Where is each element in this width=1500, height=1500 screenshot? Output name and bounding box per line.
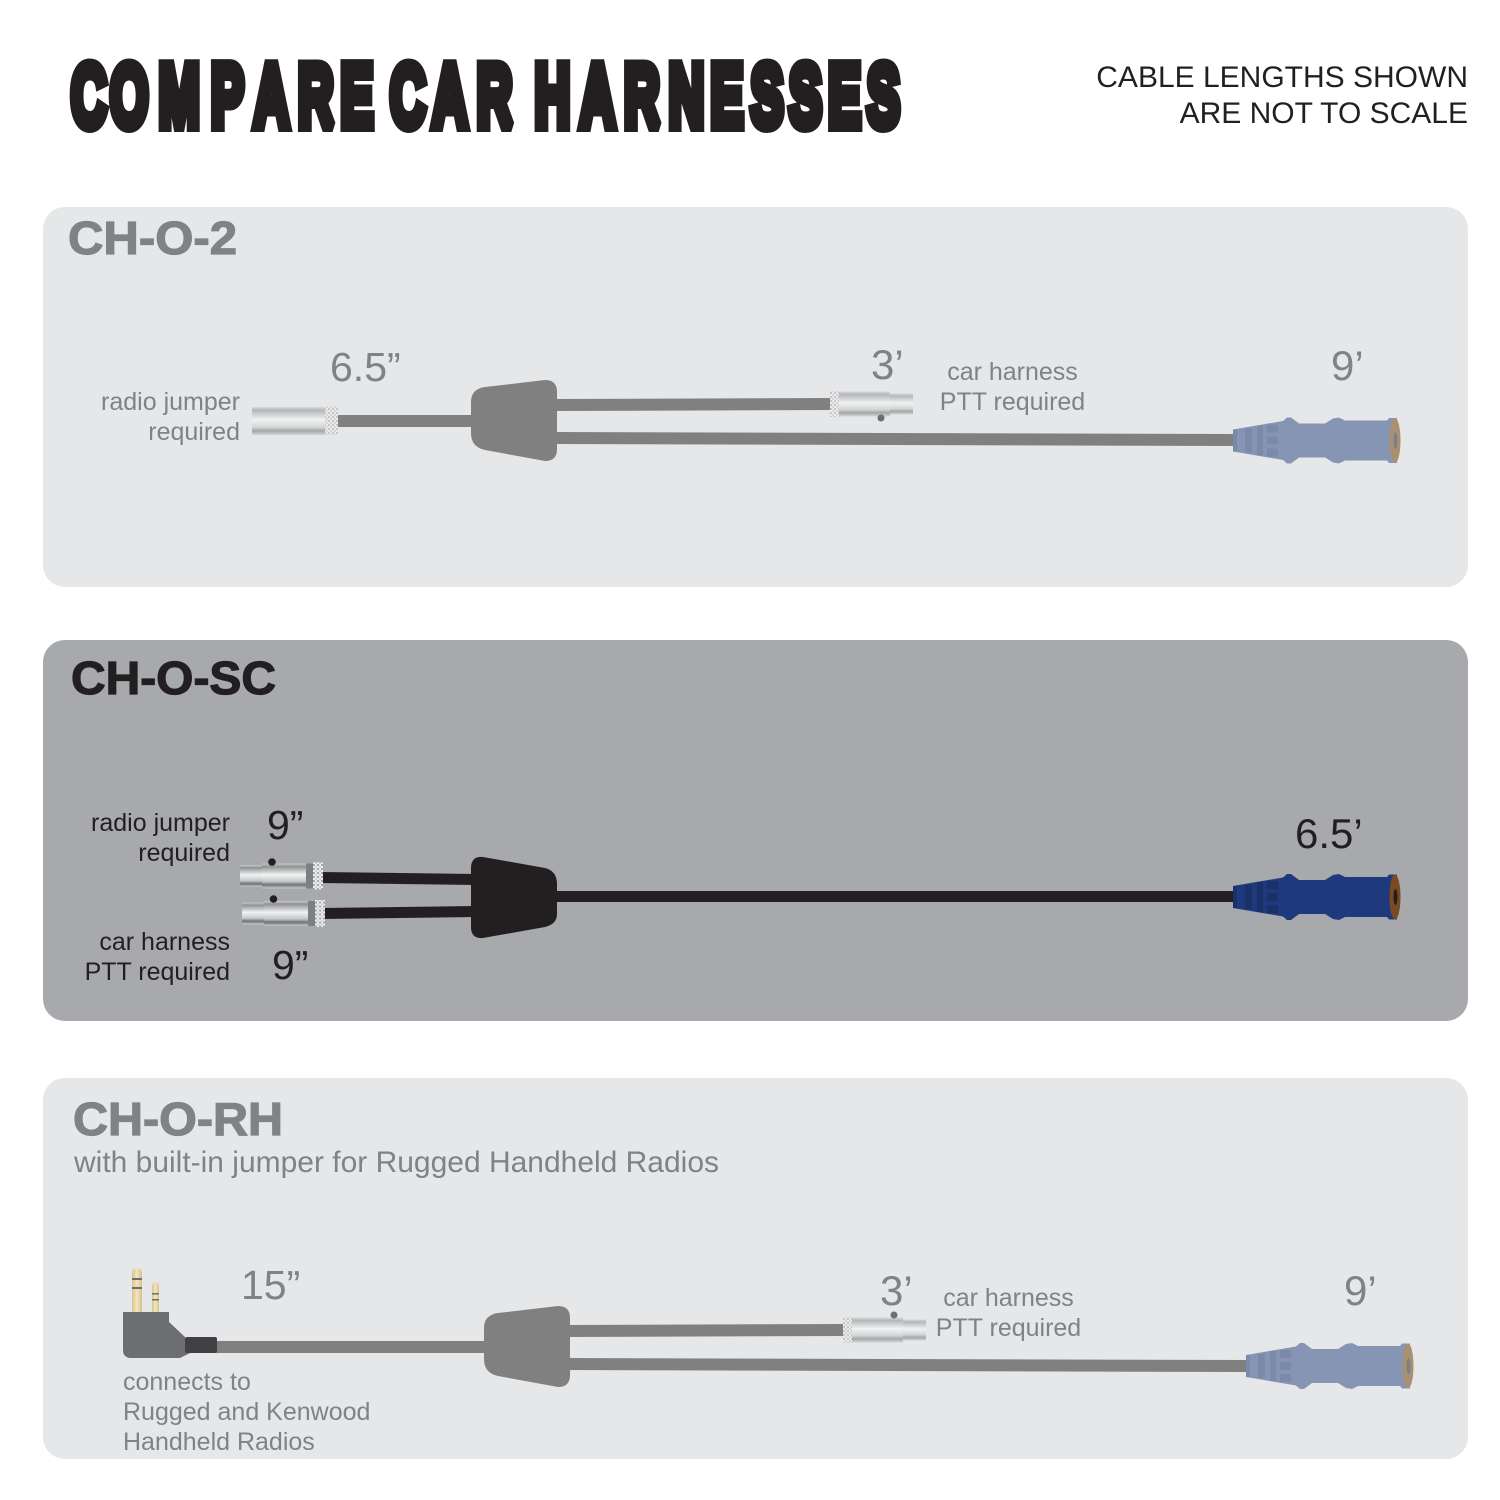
label: radio jumper required: required xyxy=(148,418,240,446)
connector: radio jumper xyxy=(240,858,323,890)
label: car harness PTT required: car harness xyxy=(943,1284,1074,1312)
label: connects to Rugged and Kenwood radios: Handheld Radios xyxy=(123,1428,315,1456)
label: 6.5 inch: 6.5” xyxy=(330,344,401,390)
panel: CH-O-RH xyxy=(43,1078,1468,1459)
label: 9 feet: 9’ xyxy=(1331,342,1364,389)
panel background xyxy=(43,1078,1468,1459)
label: car harness PTT required: PTT required xyxy=(85,958,230,986)
scale note: CABLE LENGTHS SHOWN xyxy=(1096,61,1468,94)
label: car harness PTT required xyxy=(940,358,1085,416)
connector: blue plug xyxy=(1233,874,1400,920)
connector: radio jumper end xyxy=(252,406,338,435)
scale note: ARE NOT TO SCALE xyxy=(1180,97,1468,130)
label: radio jumper required: radio jumper xyxy=(91,809,230,837)
connector: blue plug xyxy=(1233,418,1400,464)
connector: blue plug xyxy=(1246,1343,1414,1389)
junction molding xyxy=(471,857,557,938)
heading: CH-O-RH: CH-O-RH xyxy=(73,1093,283,1145)
label: radio jumper required xyxy=(101,388,240,446)
panel background xyxy=(43,640,1468,1021)
heading: CH-O-SC: CH-O-SC xyxy=(71,652,276,704)
heading: CH-O-2: CH-O-2 xyxy=(68,212,237,264)
scale note xyxy=(1096,61,1468,130)
panel background xyxy=(43,207,1468,587)
label: connects to Rugged and Kenwood radios: Rugged and Kenwood xyxy=(123,1398,370,1426)
label: car harness PTT required: car harness xyxy=(99,928,230,956)
label: car harness PTT required xyxy=(936,1284,1081,1342)
subheading: with built-in jumper for Rugged Handheld Radios xyxy=(73,1146,719,1179)
label: 3 feet: 3’ xyxy=(880,1267,913,1314)
label: car harness PTT required: PTT required xyxy=(936,1314,1081,1342)
label: car harness PTT required xyxy=(85,928,230,986)
connector: car harness PTT xyxy=(843,1312,926,1343)
cables xyxy=(320,872,1236,919)
label: radio jumper required: radio jumper xyxy=(101,388,240,416)
connector: car harness PTT xyxy=(830,391,913,422)
junction molding xyxy=(471,380,557,461)
title: COMPARE CAR HARNESSES xyxy=(71,47,900,146)
icon: right-angle radio plug xyxy=(123,1268,217,1358)
label: connects to Rugged and Kenwood radios: connects to xyxy=(123,1368,251,1396)
label: 15 inch: 15” xyxy=(241,1262,300,1308)
label: radio jumper required xyxy=(91,809,230,867)
label: 9 inch lower: 9” xyxy=(272,942,308,988)
label: 9 inch upper: 9” xyxy=(267,802,303,848)
label: car harness PTT required: car harness xyxy=(947,358,1078,386)
connector: car harness xyxy=(242,895,325,927)
panel: CH-O-SC xyxy=(43,640,1468,1021)
cables xyxy=(336,398,1236,446)
junction molding xyxy=(484,1306,570,1387)
label: 3 feet: 3’ xyxy=(871,341,904,388)
label: 9 feet: 9’ xyxy=(1344,1267,1377,1314)
label: 6.5 feet: 6.5’ xyxy=(1295,810,1363,857)
cables xyxy=(215,1324,1250,1372)
label: radio jumper required: required xyxy=(138,839,230,867)
label: connects to Rugged and Kenwood radios xyxy=(123,1368,370,1456)
label: car harness PTT required: PTT required xyxy=(940,388,1085,416)
panel: CH-O-2 xyxy=(43,207,1468,587)
